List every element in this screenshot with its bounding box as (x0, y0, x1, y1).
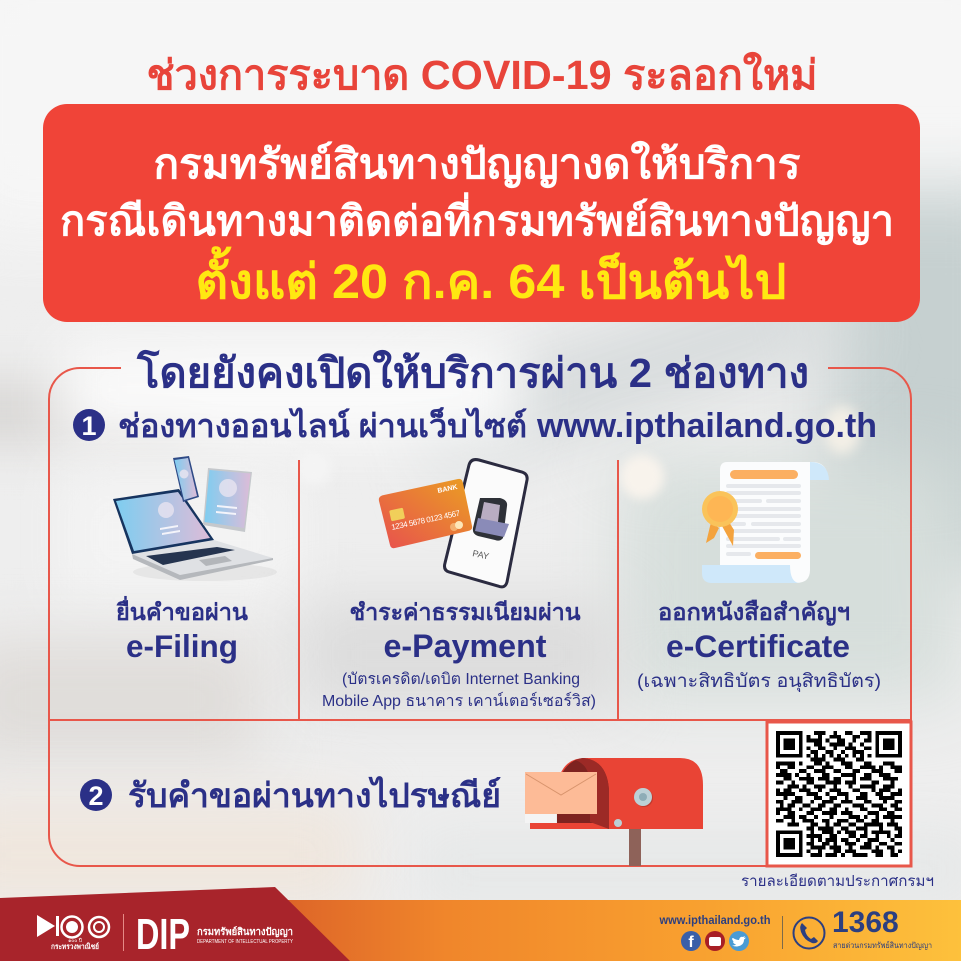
icon: certificate (702, 462, 829, 583)
icons: social (681, 931, 749, 951)
icon: mailbox (525, 758, 703, 866)
hotline 1368: 1368 (832, 906, 899, 939)
icon: credit card and phone: BANK (437, 484, 458, 495)
logo: MOC: กระทรวงพาณิชย์ (51, 942, 99, 951)
notice line 1: กรมทรัพย์สินทางปัญญางดให้บริการ (154, 140, 800, 188)
text: e-Certificate: e-Certificate (666, 628, 850, 664)
hotline 1368 (832, 906, 932, 950)
logo: DIP (136, 910, 294, 959)
logo: MOC (37, 915, 109, 951)
text: e-Payment (322, 599, 596, 710)
icon: laptop and devices (113, 456, 277, 581)
channel 1 heading (73, 406, 877, 445)
panel: red notice (43, 104, 920, 322)
channel 1 heading: ช่องทางออนไลน์ ผ่านเว็บไซต์ (118, 406, 527, 444)
text: e-Payment: e-Payment (384, 628, 547, 664)
logo: MOC: ๑๐๐ ปี (68, 937, 82, 944)
text: e-Certificate (637, 599, 881, 693)
text: e-Payment: Mobile App ธนาคาร เคาน์เตอร์เซอร์วิส) (322, 691, 596, 710)
QR code (767, 722, 911, 866)
icon: phone (794, 918, 824, 948)
notice line 2: กรณีเดินทางมาติดต่อที่กรมทรัพย์สินทางปัญญา (60, 192, 894, 245)
text: e-Filing: e-Filing (126, 628, 238, 664)
panel: channels frame (49, 368, 911, 866)
text: e-Filing (115, 595, 248, 664)
icon: credit card and phone (379, 460, 527, 587)
text: e-Payment: ชำระค่าธรรมเนียมผ่าน (350, 599, 581, 625)
text: e-Certificate: ออกหนังสือสำคัญฯ (658, 599, 850, 626)
text: e-Certificate: (เฉพาะสิทธิบัตร อนุสิทธิบัตร) (637, 670, 881, 693)
notice date: ตั้งแต่ 20 ก.ค. 64 เป็นต้นไป (196, 246, 786, 309)
footer: orange band (275, 900, 961, 961)
channel 2 heading: รับคำขอผ่านทางไปรษณีย์ (128, 776, 501, 815)
channel 1 heading: www.ipthailand.go.th (536, 407, 877, 445)
heading: channels: โดยยังคงเปิดให้บริการผ่าน 2 ช่องทาง (136, 349, 809, 396)
note: see announcement: รายละเอียดตามประกาศกรมฯ (741, 873, 934, 890)
channel 2 heading: 2 (88, 781, 104, 811)
title: ช่วงการระบาด COVID-19 ระลอกใหม่ (146, 51, 818, 98)
channel 1 heading: 1 (81, 411, 97, 441)
logo: DIP: กรมทรัพย์สินทางปัญญา (197, 926, 293, 938)
icons: social: f (688, 934, 694, 951)
footer website: www.ipthailand.go.th (659, 915, 770, 927)
text: e-Filing: ยื่นคำขอผ่าน (115, 595, 248, 625)
text: e-Payment: (บัตรเครดิต/เดบิต Internet Banking (342, 671, 580, 688)
footer: red band (0, 887, 350, 961)
logo: DIP: DEPARTMENT OF INTELLECTUAL PROPERTY (197, 939, 294, 945)
logo: DIP: DIP (136, 910, 190, 959)
hotline 1368: สายด่วนกรมทรัพย์สินทางปัญญา (833, 940, 932, 950)
icon: credit card and phone: 1234 5678 0123 4567 (391, 508, 461, 532)
icon: credit card and phone: PAY (472, 548, 490, 561)
